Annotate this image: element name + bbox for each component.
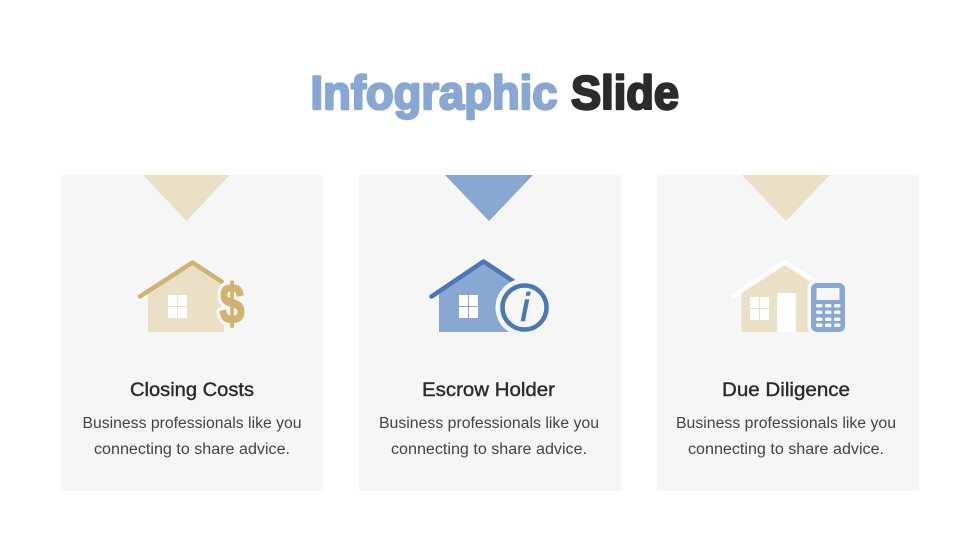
- marker triangle: [143, 175, 230, 221]
- heading: Closing Costs: [130, 379, 254, 401]
- panel: due diligence: [657, 175, 919, 491]
- icon: house with dollar sign: $: [220, 272, 244, 335]
- icon: house with info badge: i: [521, 286, 531, 330]
- description: connecting to share advice.: [94, 441, 290, 458]
- heading: Escrow Holder: [422, 379, 556, 401]
- icon: house with info badge: [432, 262, 554, 336]
- icon: house with dollar sign: [140, 262, 244, 335]
- description: [676, 415, 896, 458]
- panel: closing costs: [61, 175, 323, 491]
- description: Business professionals like you: [82, 415, 302, 432]
- icon: house with dollar sign: $: [220, 272, 244, 335]
- title: [310, 66, 679, 119]
- marker triangle: [742, 175, 830, 221]
- panel: escrow holder: [359, 175, 621, 491]
- icon: house with calculator: [733, 262, 848, 336]
- description: connecting to share advice.: [391, 441, 587, 458]
- description: [379, 415, 599, 458]
- title: Slide: [571, 66, 679, 119]
- description: Business professionals like you: [676, 415, 896, 432]
- description: connecting to share advice.: [688, 441, 884, 458]
- description: [82, 415, 302, 458]
- description: Business professionals like you: [379, 415, 599, 432]
- title: Infographic: [310, 66, 558, 119]
- heading: Due Diligence: [722, 379, 850, 401]
- marker triangle: [445, 175, 533, 221]
